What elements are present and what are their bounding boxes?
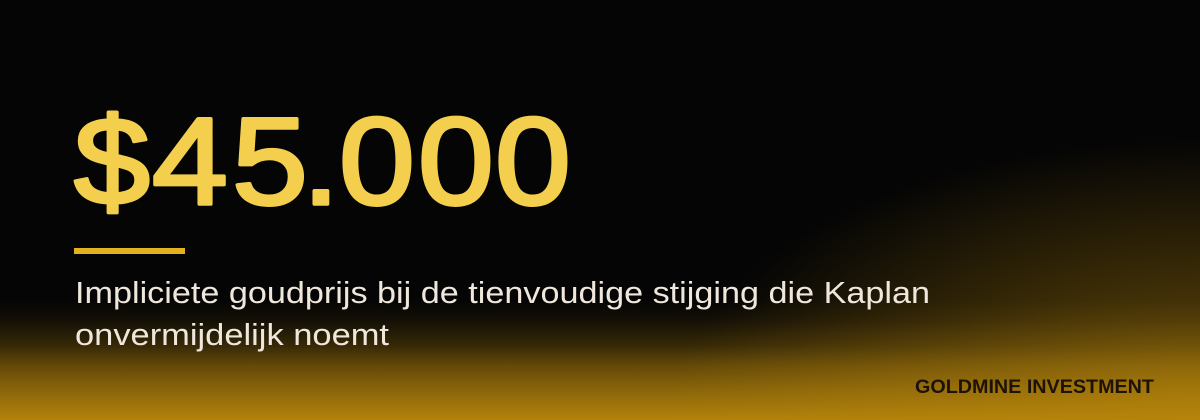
description text — [75, 275, 930, 352]
brand label: GOLDMINE INVESTMENT — [915, 377, 1154, 398]
description text: onvermijdelijk noemt — [75, 317, 389, 352]
big number: $45.000 — [74, 92, 571, 231]
description text: Impliciete goudprijs bij de tienvoudige stijging die Kaplan — [75, 275, 930, 310]
accent bar — [74, 248, 185, 254]
